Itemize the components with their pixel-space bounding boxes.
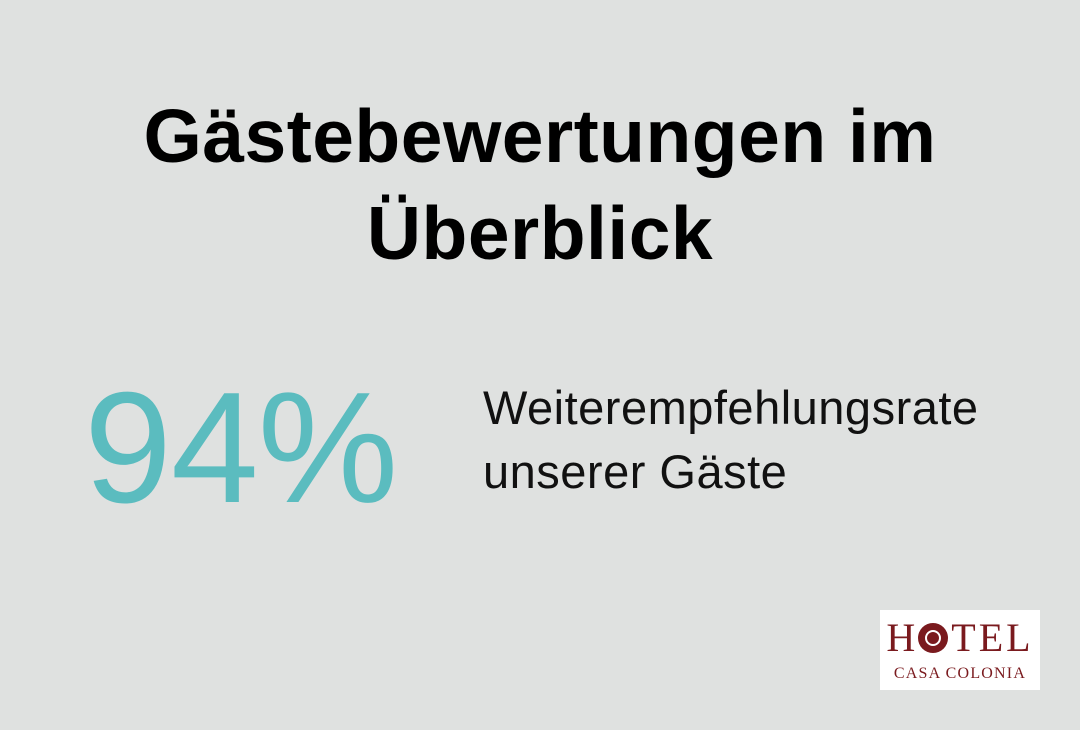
description text: unserer Gäste: [483, 445, 787, 498]
title: [143, 94, 936, 275]
title: Überblick: [367, 191, 713, 275]
logo: Hotel Casa Colonia: CASA COLONIA: [894, 665, 1026, 682]
big number: 94%: 94%: [84, 360, 397, 536]
logo: Hotel Casa Colonia: [880, 610, 1040, 690]
title: Gästebewertungen im: [143, 94, 936, 178]
description text: [483, 381, 979, 498]
logo: Hotel Casa Colonia: H TEL: [886, 615, 1034, 660]
description text: Weiterempfehlungsrate: [483, 381, 979, 434]
